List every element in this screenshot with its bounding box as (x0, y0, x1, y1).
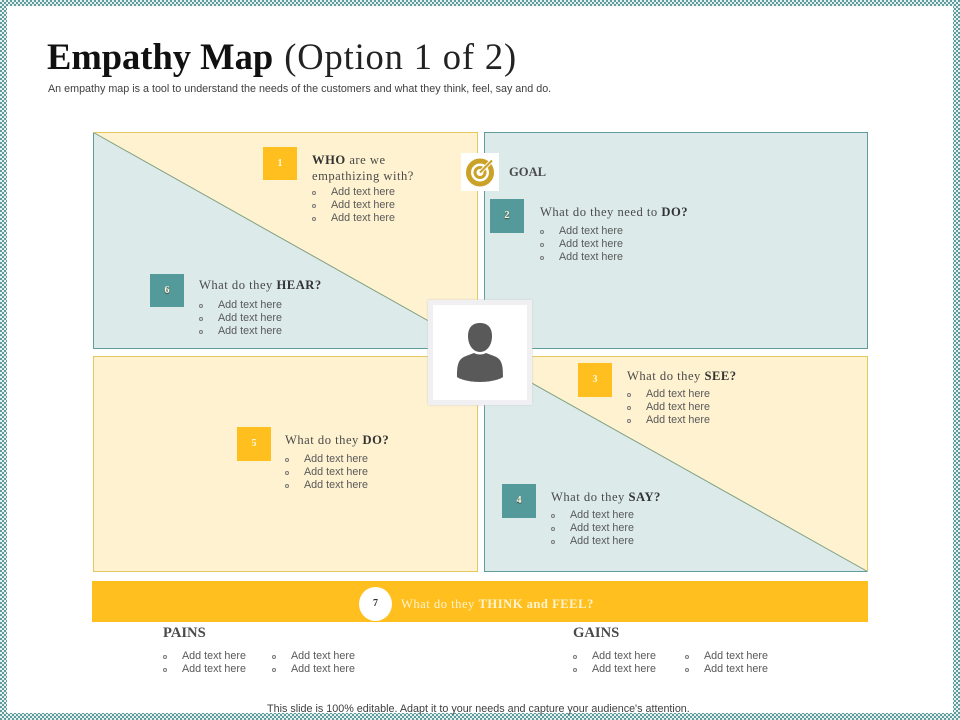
list: see: Add text here (646, 401, 710, 413)
badge 2: 2 (504, 210, 510, 221)
badge 6: 6 (164, 285, 170, 296)
list: who: Add text here (331, 186, 395, 198)
list: gains column 2: Add text here (704, 650, 768, 662)
panel: top left who and hear (93, 132, 478, 349)
list: pains column 2: Add text here (291, 663, 355, 675)
icon: goal target (461, 153, 499, 191)
list: hear: Add text here (218, 312, 282, 324)
list: who (312, 186, 395, 224)
list: pains column 1: Add text here (182, 663, 246, 675)
badge 5 (237, 427, 271, 461)
badge 4 (502, 484, 536, 518)
list: who: Add text here (331, 199, 395, 211)
list: pains column 1: Add text here (182, 650, 246, 662)
list: need to do: Add text here (559, 225, 623, 237)
heading: see: What do they SEE? (627, 369, 737, 383)
list: hear: Add text here (218, 325, 282, 337)
list: do (285, 453, 368, 491)
list: need to do (540, 225, 623, 263)
footer note: This slide is 100% editable. Adapt it to your needs and capture your audience's attention. (267, 703, 690, 715)
list: do: Add text here (304, 466, 368, 478)
heading: need to do: What do they need to DO? (540, 205, 688, 219)
list: pains column 2: Add text here (291, 650, 355, 662)
heading: gains: GAINS (573, 625, 619, 641)
badge 3: 3 (592, 374, 598, 385)
badge 1 (263, 147, 297, 180)
list: say: Add text here (570, 535, 634, 547)
list: gains column 1 (573, 650, 656, 675)
list: pains column 2 (272, 650, 355, 675)
badge 7 (359, 587, 392, 621)
list: need to do: Add text here (559, 251, 623, 263)
banner heading: What do they THINK and FEEL? (401, 597, 594, 611)
panel: top right do (484, 132, 868, 349)
heading: hear: What do they HEAR? (199, 278, 322, 292)
list: gains column 2: Add text here (704, 663, 768, 675)
list: hear (199, 299, 282, 337)
badge 4: 4 (516, 495, 522, 506)
panel: bottom left do (93, 356, 478, 572)
panel: bottom right see and say (484, 356, 868, 572)
heading: pains: PAINS (163, 625, 206, 641)
list: gains column 2 (685, 650, 768, 675)
heading: who: WHO are we (312, 153, 386, 167)
list: who: Add text here (331, 212, 395, 224)
badge 1: 1 (278, 158, 282, 169)
banner: think and feel (92, 581, 868, 622)
heading: who: empathizing with? (312, 169, 414, 183)
heading: do: What do they DO? (285, 433, 389, 447)
center person card (428, 300, 532, 405)
badge 6 (150, 274, 184, 307)
list: do: Add text here (304, 479, 368, 491)
list: hear: Add text here (218, 299, 282, 311)
list: see (627, 388, 710, 426)
list: see: Add text here (646, 388, 710, 400)
heading: say: What do they SAY? (551, 490, 661, 504)
goal label: GOAL (509, 165, 546, 179)
title: Empathy Map (Option 1 of 2) (47, 36, 517, 77)
list: gains column 1: Add text here (592, 663, 656, 675)
list: say: Add text here (570, 509, 634, 521)
heading: who (312, 153, 414, 183)
list: say (551, 509, 634, 547)
badge 5: 5 (252, 438, 256, 449)
list: gains column 1: Add text here (592, 650, 656, 662)
subtitle: An empathy map is a tool to understand the needs of the customers and what they think, feel, say and do. (48, 83, 551, 95)
list: do: Add text here (304, 453, 368, 465)
list: need to do: Add text here (559, 238, 623, 250)
badge 2 (490, 199, 524, 233)
list: say: Add text here (570, 522, 634, 534)
list: pains column 1 (163, 650, 246, 675)
badge 7: 7 (373, 598, 378, 609)
list: see: Add text here (646, 414, 710, 426)
badge 3 (578, 363, 612, 397)
